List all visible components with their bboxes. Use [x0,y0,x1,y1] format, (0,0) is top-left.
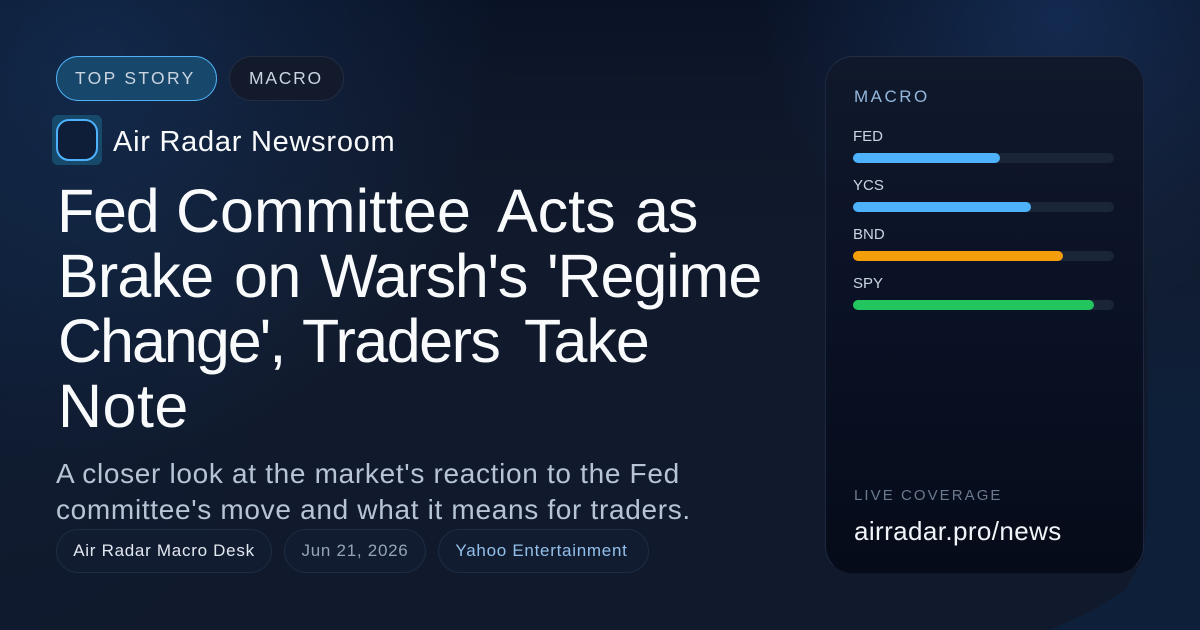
title: Take [524,307,649,375]
tag: top story [56,56,217,101]
panel heading: MACRO [854,87,930,106]
brand name: Air Radar Newsroom [113,126,395,158]
title: Traders [302,307,499,375]
meta: source [438,529,649,573]
title: 'Regime [547,242,761,310]
bar: FED [853,128,1114,163]
title: as [635,177,697,245]
subtitle: A closer look at the market's reaction to the Fed [56,458,680,489]
subtitle: committee's move and what it means for traders. [56,494,691,525]
tag: top story: TOP STORY [75,68,196,88]
meta: source: Yahoo Entertainment [455,541,628,560]
meta: date [284,529,426,573]
title: Acts [497,177,616,245]
bar: YCS: YCS [853,177,884,194]
title: Fed [57,177,159,245]
tag: macro: MACRO [249,68,323,88]
footer label: LIVE COVERAGE [854,487,1002,504]
title: Change', [58,307,284,375]
bar: SPY: SPY [853,275,883,292]
title [57,177,761,440]
title: on [234,242,301,310]
bar: SPY [853,275,1114,310]
bar: YCS [853,177,1114,212]
icon: brand logo [52,115,102,165]
panel: macro sidebar [825,56,1144,574]
footer url: airradar.pro/news [854,516,1062,546]
tag: macro [229,56,344,101]
title: Brake [58,242,213,310]
subtitle [56,458,691,525]
bar: BND: BND [853,226,885,243]
title: Warsh's [320,242,527,310]
bar: BND [853,226,1114,261]
title: Note [58,372,189,440]
meta: date: Jun 21, 2026 [302,541,408,560]
meta: author [56,529,272,573]
meta: author: Air Radar Macro Desk [73,541,255,560]
title: Committee [176,177,471,245]
bar: FED: FED [853,128,883,145]
